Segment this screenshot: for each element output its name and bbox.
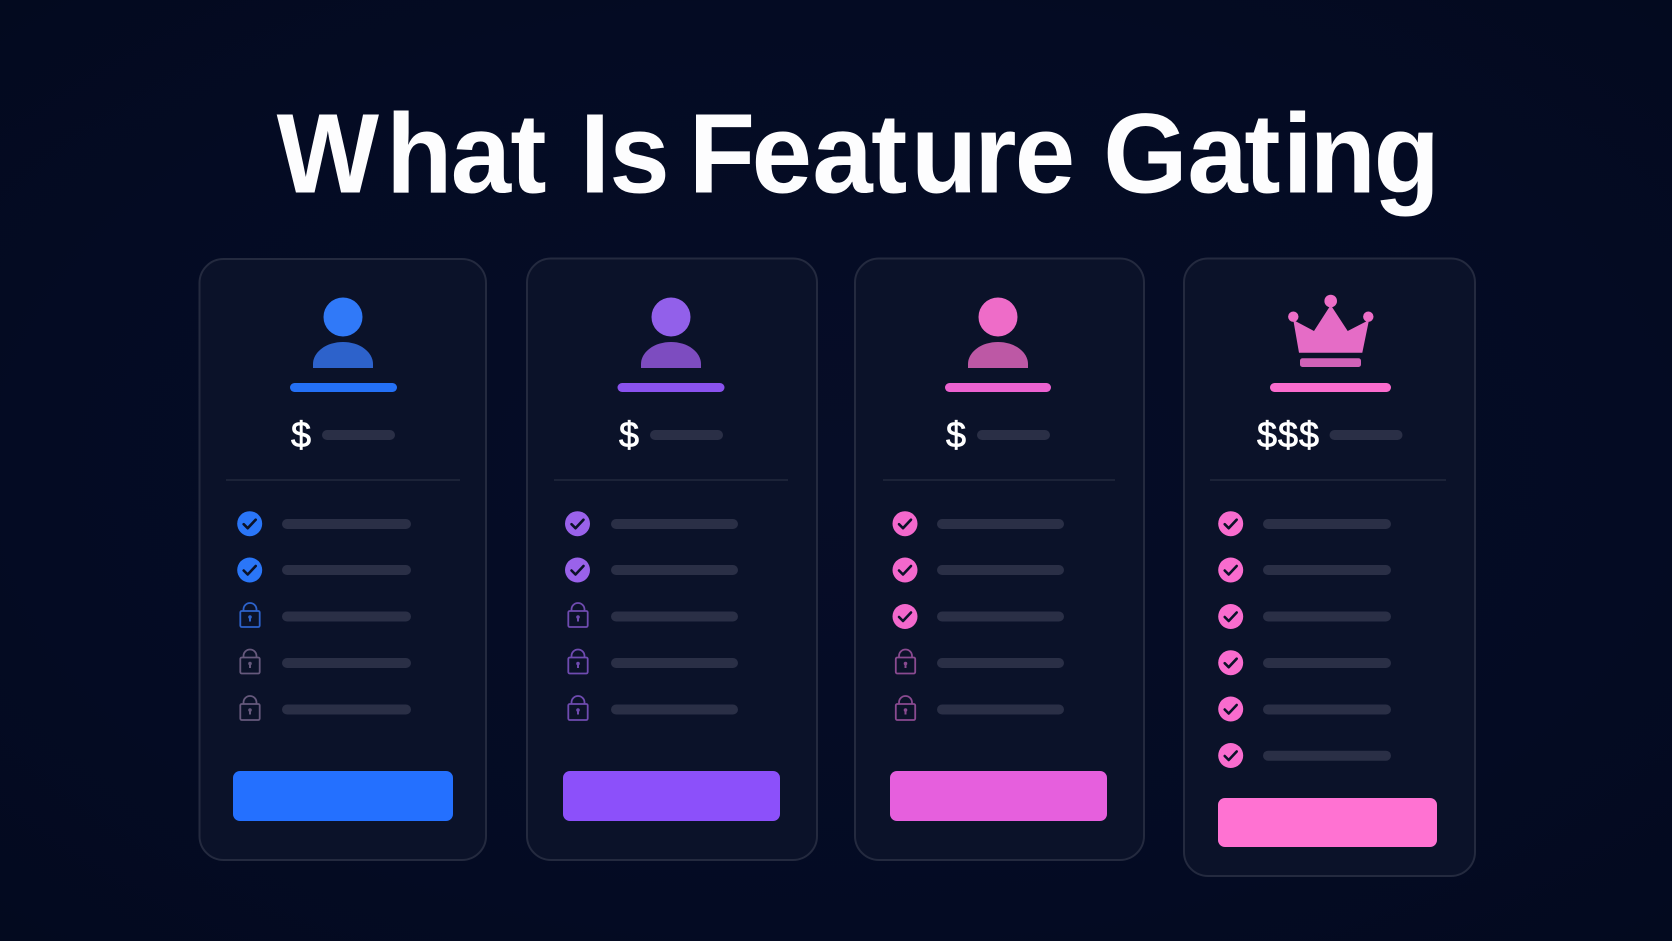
- icon: check 4: [1218, 650, 1243, 675]
- feature line 4: [611, 658, 738, 668]
- icon: check 1: [892, 511, 918, 536]
- price placeholder: [977, 430, 1050, 440]
- icon: lock 5: [240, 696, 260, 720]
- feature line 3: [937, 612, 1064, 622]
- icon: check 6: [1218, 743, 1243, 768]
- feature line 5: [611, 704, 738, 714]
- feature line 4: [1263, 658, 1391, 668]
- tier 2 accent bar: [618, 383, 724, 392]
- feature line 1: [937, 519, 1064, 529]
- price placeholder: [1330, 430, 1402, 440]
- feature line 5: [282, 704, 411, 714]
- feature line 2: [611, 565, 738, 575]
- tier 2 button: [563, 771, 780, 821]
- feature line 2: [282, 565, 411, 575]
- tier 4 button: [1218, 798, 1437, 847]
- price placeholder: [322, 430, 395, 440]
- feature line 1: [611, 519, 738, 529]
- icon: check 2: [565, 558, 590, 582]
- icon: lock 4: [568, 650, 588, 674]
- icon: check 2: [1218, 558, 1243, 582]
- tier 1 accent bar: [290, 383, 397, 392]
- price symbol: $$$: [1257, 414, 1319, 455]
- icon: check 3: [892, 604, 918, 629]
- panel: tier 4 card: [1184, 258, 1475, 876]
- tier 4 accent bar: [1270, 383, 1391, 392]
- panel: tier 3 card: [855, 258, 1144, 860]
- feature line 3: [1263, 612, 1391, 622]
- icon: lock 5: [896, 696, 915, 720]
- icon: check 2: [892, 558, 918, 582]
- feature line 6: [1263, 751, 1391, 761]
- panel: tier 1 card: [200, 259, 486, 860]
- icon: check 2: [237, 558, 262, 582]
- feature line 1: [1263, 519, 1391, 529]
- icon: check 1: [565, 511, 590, 536]
- price symbol: $: [619, 414, 639, 455]
- price placeholder: [650, 430, 723, 440]
- panel: tier 2 card: [527, 258, 817, 860]
- feature line 4: [282, 658, 411, 668]
- tier 1 button: [233, 771, 453, 821]
- feature line 4: [937, 658, 1064, 668]
- icon: lock 3: [568, 603, 588, 627]
- icon: check 1: [1218, 511, 1243, 536]
- tier 3 accent bar: [945, 383, 1051, 392]
- tier 3 button: [890, 771, 1107, 821]
- feature line 3: [611, 612, 738, 622]
- icon: lock 4: [240, 650, 260, 674]
- feature line 5: [1263, 704, 1391, 714]
- icon: check 1: [237, 511, 262, 536]
- price symbol: $: [291, 414, 311, 455]
- feature line 2: [937, 565, 1064, 575]
- icon: lock 5: [568, 696, 588, 720]
- icon: check 3: [1218, 604, 1243, 629]
- icon: crown: [1288, 295, 1374, 367]
- title: What Is Feature Gating: [277, 92, 1440, 217]
- icon: pink user: [968, 298, 1028, 368]
- feature line 2: [1263, 565, 1391, 575]
- icon: lock 3: [240, 603, 260, 627]
- price symbol: $: [946, 414, 966, 455]
- icon: lock 4: [896, 650, 915, 674]
- feature line 5: [937, 704, 1064, 714]
- icon: purple user: [641, 298, 701, 368]
- feature line 1: [282, 519, 411, 529]
- icon: check 5: [1218, 696, 1243, 722]
- icon: blue user: [313, 298, 373, 368]
- feature line 3: [282, 612, 411, 622]
